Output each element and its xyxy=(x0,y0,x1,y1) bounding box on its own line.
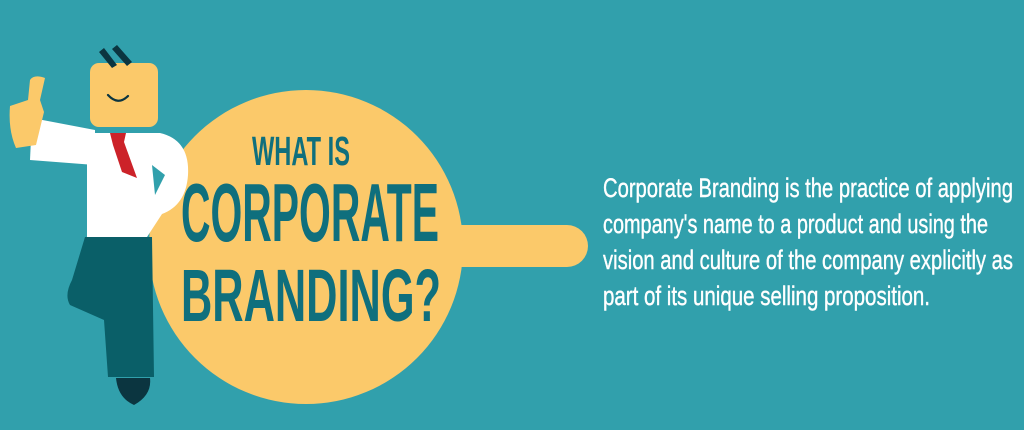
description text xyxy=(603,173,1013,311)
description text: part of its unique selling proposition. xyxy=(603,281,930,311)
hair xyxy=(99,45,132,68)
circle xyxy=(149,90,463,404)
hand with thumb xyxy=(10,76,45,148)
head xyxy=(90,63,158,127)
title xyxy=(181,128,441,337)
title: BRANDING? xyxy=(181,254,441,337)
pants xyxy=(67,237,154,377)
shoe xyxy=(116,378,150,405)
tie xyxy=(110,133,137,178)
arm gap xyxy=(152,165,165,195)
smile xyxy=(108,95,128,101)
shirt body xyxy=(87,133,188,237)
title: WHAT IS xyxy=(252,128,350,174)
character: businessman thumbs up xyxy=(10,45,188,405)
raised arm xyxy=(30,118,95,165)
handle xyxy=(440,225,588,267)
text: CORPORATE xyxy=(181,166,439,259)
magnifier: circle with handle xyxy=(149,90,588,404)
